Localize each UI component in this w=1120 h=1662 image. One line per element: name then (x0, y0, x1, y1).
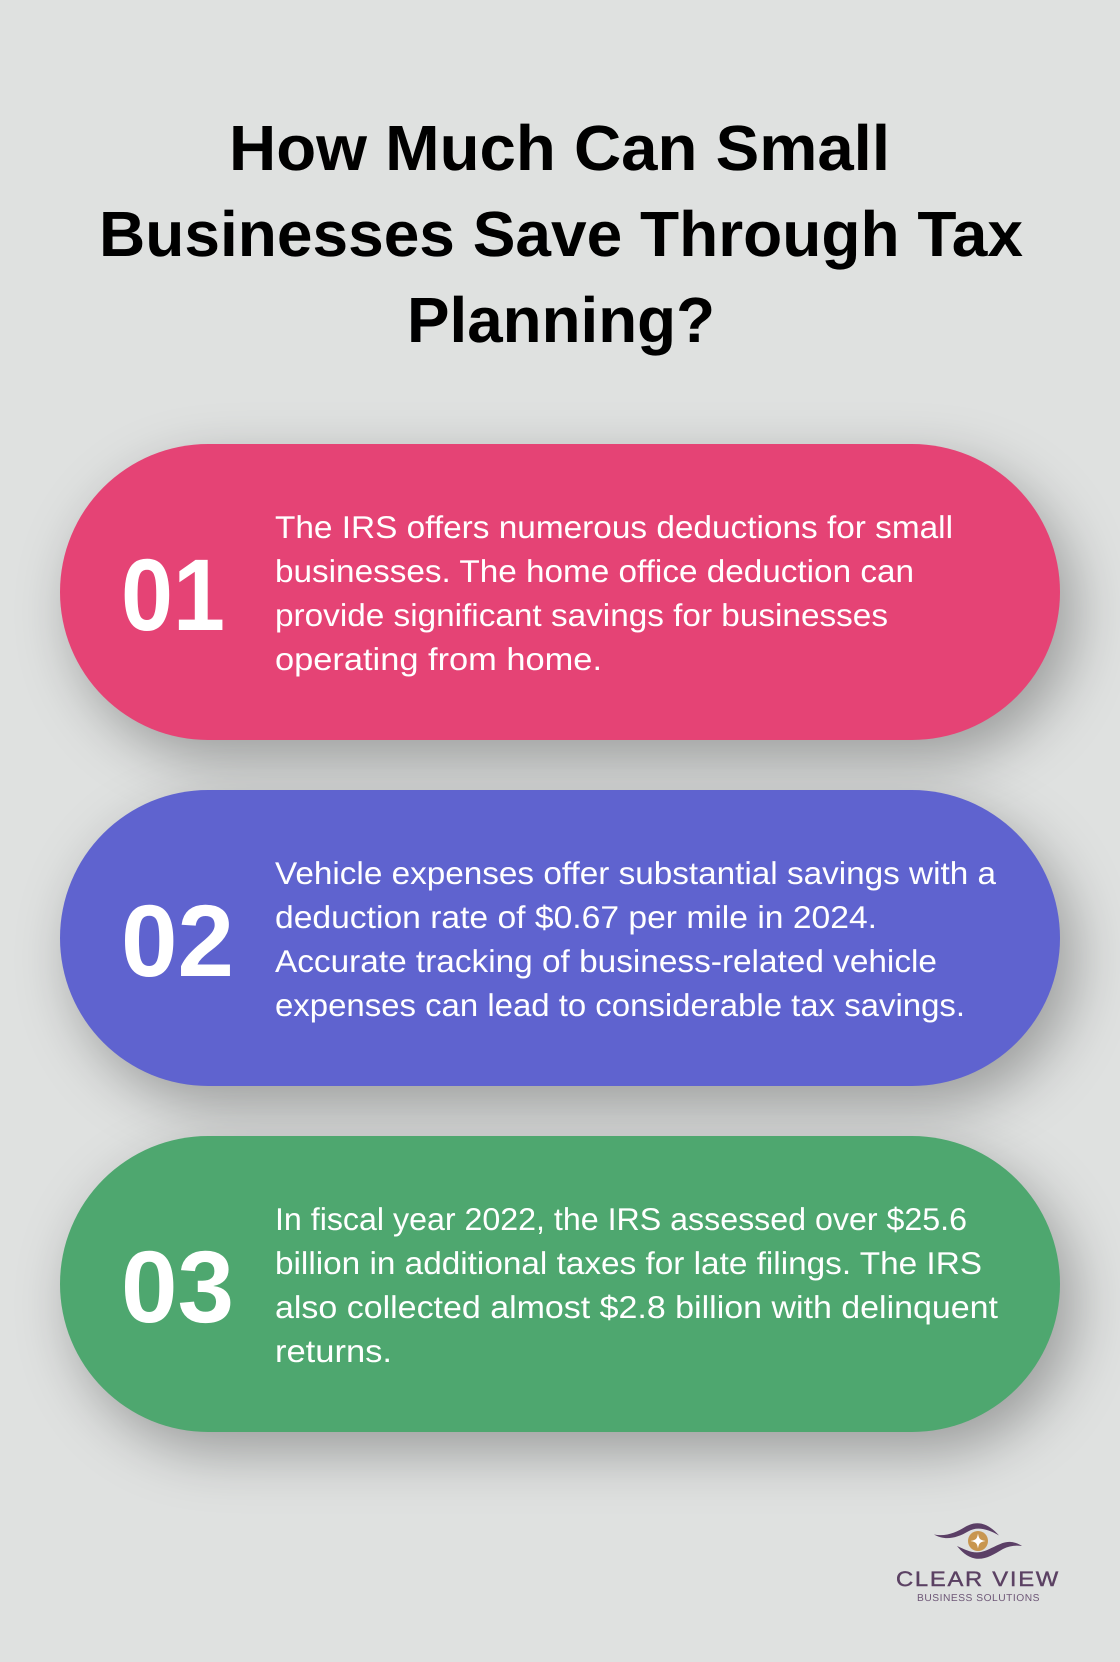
text block 01: operating from home. (275, 641, 602, 677)
text block 03: also collected almost $2.8 billion with delinquent (275, 1289, 998, 1325)
panel: 01 home office deduction (60, 444, 1060, 740)
icon: eye with star (934, 1523, 1022, 1559)
text block 02: Vehicle expenses offer substantial savings with a (275, 855, 997, 891)
text block 03 (275, 1201, 998, 1369)
title: How Much Can Small (229, 112, 890, 184)
title: Planning? (407, 284, 715, 356)
pill background 01 (60, 444, 1060, 740)
logo wordmark: CLEAR VIEW (896, 1568, 1060, 1591)
panel: 03 late filing assessments (60, 1136, 1060, 1432)
number 03: 03 (121, 1230, 234, 1344)
pill background 02 (60, 790, 1060, 1086)
title: Businesses Save Through Tax (99, 198, 1023, 270)
number 01: 01 (121, 538, 225, 652)
text block 01: provide significant savings for businesses (275, 597, 888, 633)
title (99, 112, 1023, 356)
text block 02 (275, 855, 997, 1023)
text block 03: In fiscal year 2022, the IRS assessed over $25.6 (275, 1201, 967, 1237)
text block 02: Accurate tracking of business-related vehicle (275, 943, 937, 979)
panel: 02 vehicle expenses (60, 790, 1060, 1086)
text block 02: deduction rate of $0.67 per mile in 2024. (275, 899, 877, 935)
text block 01: The IRS offers numerous deductions for small (275, 509, 953, 545)
logo: Clear View Business Solutions (896, 1523, 1060, 1604)
text block 01 (275, 509, 953, 677)
pill background 03 (60, 1136, 1060, 1432)
logo tagline: BUSINESS SOLUTIONS (917, 1593, 1040, 1604)
text block 01: businesses. The home office deduction can (275, 553, 914, 589)
text block 02: expenses can lead to considerable tax savings. (275, 987, 965, 1023)
text block 03: returns. (275, 1333, 392, 1369)
text block 03: billion in additional taxes for late filings. The IRS (275, 1245, 982, 1281)
number 02: 02 (121, 884, 234, 998)
